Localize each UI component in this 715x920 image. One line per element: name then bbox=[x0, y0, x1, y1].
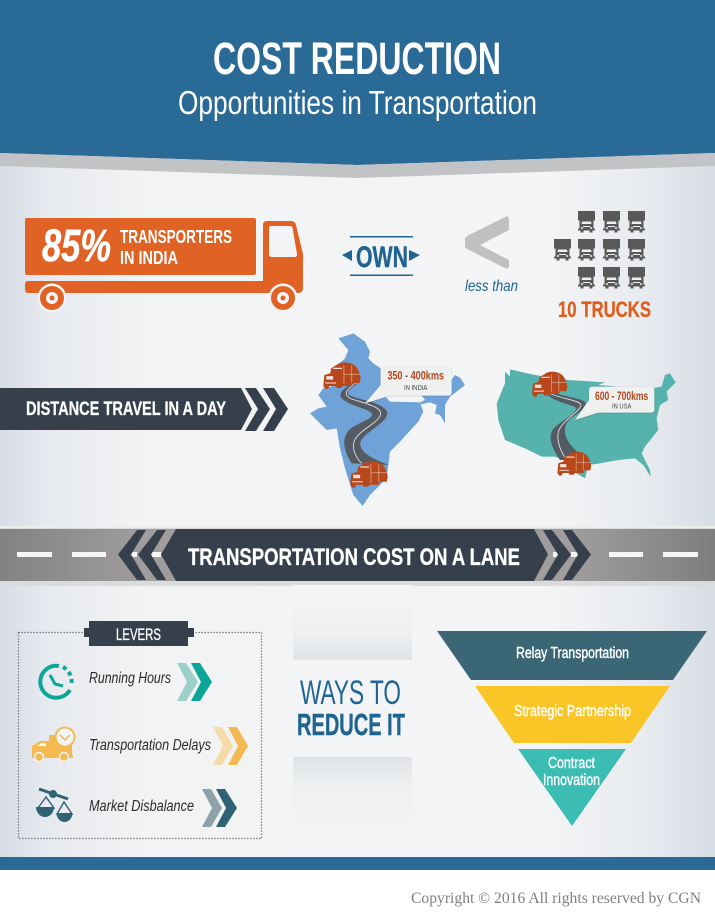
85% figure: 85% bbox=[42, 220, 111, 271]
ways to heading: REDUCE IT bbox=[297, 707, 405, 742]
chevrons: running hours bbox=[177, 663, 212, 701]
map: India bbox=[310, 333, 465, 506]
chevrons: transportation delays bbox=[213, 727, 248, 765]
copyright: Copyright © 2016 All rights reserved by CGN bbox=[411, 890, 701, 907]
OWN label bbox=[342, 236, 420, 276]
icon: clock bbox=[40, 666, 72, 698]
truck bottom bbox=[350, 461, 388, 488]
gradient panel bottom bbox=[293, 757, 412, 836]
callout: 600-700 kms: IN USA bbox=[612, 402, 631, 411]
icon: scales bbox=[36, 789, 72, 822]
funnel tier: contract innovation bbox=[518, 749, 626, 826]
road bbox=[547, 392, 586, 460]
subtitle: Opportunities in Transportation bbox=[178, 84, 537, 121]
callout: 350-400 kms: 350 - 400kms bbox=[387, 369, 444, 383]
lever text: market disbalance: Market Disbalance bbox=[89, 798, 194, 815]
road banner: transportation cost on a lane bbox=[0, 526, 715, 586]
chevrons: market disbalance bbox=[202, 789, 237, 827]
callout: 350-400 kms: IN INDIA bbox=[404, 383, 427, 392]
funnel tier: relay transportation: Relay Transportation bbox=[516, 645, 629, 662]
lever text: transportation delays: Transportation Delays bbox=[89, 737, 211, 754]
funnel tier: relay transportation bbox=[437, 631, 707, 680]
road banner title: TRANSPORTATION COST ON A LANE bbox=[188, 544, 520, 571]
callout: 600-700 kms: 600 - 700kms bbox=[595, 390, 648, 403]
funnel tier: contract innovation: Innovation bbox=[543, 772, 600, 789]
levers tag: LEVERS bbox=[116, 625, 161, 644]
truck: 85% transporters in India bbox=[25, 218, 303, 312]
funnel tier: strategic partnership: Strategic Partnership bbox=[514, 703, 631, 720]
ways to heading: WAYS TO bbox=[300, 674, 401, 712]
less than caption: less than bbox=[465, 278, 518, 295]
footer band bbox=[0, 857, 715, 870]
lever text: running hours: Running Hours bbox=[89, 670, 171, 687]
gradient panel top bbox=[293, 585, 412, 660]
truck bottom bbox=[557, 452, 591, 476]
banner: distance travel in a day: DISTANCE TRAVEL IN A DAY bbox=[26, 399, 226, 420]
callout: 350-400 kms bbox=[365, 367, 452, 403]
truck icon grid bbox=[554, 211, 645, 288]
truck label: transporters: TRANSPORTERS bbox=[120, 227, 232, 247]
ways to heading bbox=[297, 674, 405, 742]
banner: distance travel in a day bbox=[0, 388, 288, 431]
funnel tier: strategic partnership bbox=[475, 686, 670, 743]
road bbox=[341, 382, 389, 465]
page background bbox=[0, 150, 715, 860]
truck top bbox=[532, 372, 567, 397]
funnel tier: contract innovation: Contract bbox=[548, 755, 596, 772]
title: COST REDUCTION bbox=[213, 33, 501, 84]
less than symbol bbox=[465, 216, 518, 295]
map: USA bbox=[497, 369, 676, 478]
10 trucks label: 10 TRUCKS bbox=[558, 297, 651, 322]
panel: levers bbox=[18, 621, 262, 838]
levers tag bbox=[84, 621, 194, 646]
truck top bbox=[323, 362, 361, 389]
icon: delayed truck bbox=[32, 728, 74, 762]
callout: 600-700 kms bbox=[575, 387, 654, 420]
header band bbox=[0, 0, 715, 178]
funnel: ways to reduce bbox=[437, 631, 707, 826]
truck label: in india: IN INDIA bbox=[120, 248, 178, 268]
OWN label: OWN bbox=[356, 241, 408, 274]
